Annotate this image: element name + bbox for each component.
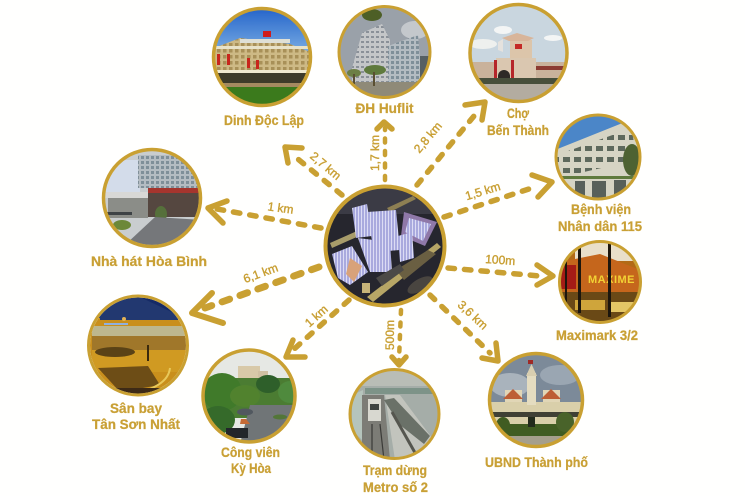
photo: San bay — [90, 298, 186, 394]
label: ĐH Huflit — [356, 101, 414, 116]
node: Maximark — [556, 241, 643, 343]
arrow: to DH Huflit, 1.7 km — [368, 122, 392, 180]
photo: towers — [328, 188, 442, 304]
ring — [326, 186, 444, 306]
node: San bay Tan Son Nhat — [87, 294, 190, 432]
label line 2: Nhân dân 115 — [558, 219, 642, 234]
label: Nhà hát Hòa Bình — [91, 254, 207, 269]
label: Chợ — [507, 106, 529, 121]
arrow: to Benh vien 115, 1.5 km — [444, 175, 552, 217]
node: DH Huflit — [338, 5, 432, 116]
ring — [556, 115, 640, 199]
label: Sân bay — [110, 401, 162, 416]
node: Cong vien Ky Hoa — [201, 348, 302, 476]
ring — [88, 296, 188, 395]
arrow: to Dinh Doc Lap, 2.7 km — [285, 147, 344, 195]
node: UBND Thanh pho — [485, 352, 588, 470]
ring — [350, 370, 439, 458]
ring — [490, 354, 582, 446]
arrow: to DH Huflit, 1.7 km: 1,7 km — [368, 135, 382, 171]
photo: Maximark: MAXIME — [588, 274, 635, 286]
arrow: to San bay, 6.1 km — [192, 261, 319, 323]
node: Benh vien Nhan dan 115 — [555, 114, 645, 234]
label: Công viên — [221, 445, 280, 460]
label: Maximark 3/2 — [556, 328, 638, 343]
photo: Cong vien — [204, 352, 294, 440]
arrow: to Cho Ben Thanh, 2.8 km — [411, 102, 485, 185]
photo: Nha hat — [105, 151, 199, 245]
arrow: to Maximark, 100m: 100m — [485, 252, 516, 268]
label line 2: Bến Thành — [487, 123, 549, 138]
node: Nha hat Hoa Binh — [91, 149, 207, 269]
ring — [560, 242, 640, 322]
photo: UBND — [491, 355, 581, 445]
ring — [470, 4, 567, 102]
arrow: to Metro, 500m — [383, 310, 406, 365]
arrow: to UBND, 3.6 km: 3,6 km — [455, 298, 491, 332]
label line 2: Kỳ Hòa — [231, 461, 271, 476]
photo: Benh vien — [558, 116, 638, 198]
arrow: to Cong vien, 1 km: 1 km — [302, 302, 331, 330]
node: Metro so 2 — [348, 368, 442, 495]
label: Trạm dừng — [363, 463, 427, 478]
arrow: to UBND, 3.6 km — [430, 295, 498, 361]
arrow: to Cong vien, 1 km — [286, 300, 349, 357]
label: Bệnh viện — [571, 202, 631, 217]
arrow: to San bay, 6.1 km: 6,1 km — [241, 261, 280, 286]
photo: DH Huflit — [340, 8, 428, 96]
label: Dinh Độc Lập — [224, 113, 304, 128]
arrow: to Maximark, 100m — [448, 252, 553, 285]
ring — [203, 350, 295, 442]
label line 2: Tân Sơn Nhất — [92, 417, 180, 432]
arrow: to Dinh Doc Lap, 2.7 km: 2,7 km — [307, 149, 344, 183]
arrow: to Cho Ben Thanh, 2.8 km: 2,8 km — [411, 119, 445, 156]
arrow: to Metro, 500m: 500m — [383, 320, 397, 350]
ring — [339, 6, 430, 98]
arrow: to Benh vien 115, 1.5 km: 1,5 km — [464, 179, 502, 203]
node: Dinh Doc Lap — [210, 5, 314, 128]
ring — [214, 8, 310, 106]
node: Cho Ben Thanh — [468, 3, 570, 138]
ring — [104, 150, 200, 246]
photo: Cho Ben Thanh — [472, 6, 566, 100]
arrow: to Nha hat, 1 km: 1 km — [267, 199, 294, 217]
label: UBND Thành phố — [485, 455, 588, 470]
photo: Metro — [352, 371, 438, 457]
center: project aerial view — [325, 186, 447, 308]
photo: Dinh Doc Lap — [215, 10, 309, 104]
arrow: to Nha hat, 1 km — [208, 199, 321, 228]
label line 2: Metro số 2 — [363, 480, 428, 495]
